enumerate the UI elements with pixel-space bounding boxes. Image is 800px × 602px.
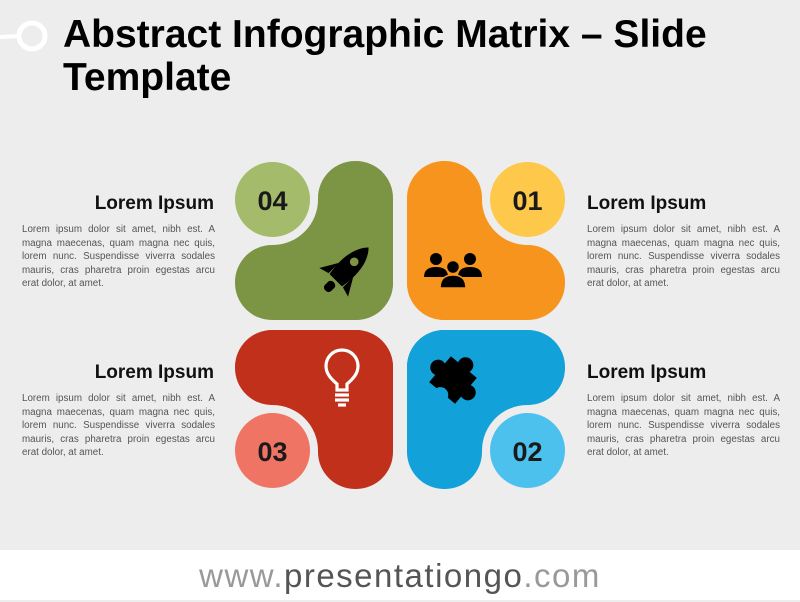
tile 04 green [227,154,393,320]
tile 03 red [227,330,393,496]
text block 01 [587,193,780,289]
title: Abstract Infographic Matrix – Slide [63,13,707,56]
text block 03 [22,362,215,458]
tile 04 green: 04 [257,186,288,216]
text: Lorem Ipsum [587,193,706,214]
icon: team [424,253,482,288]
icon: rocket [311,233,383,305]
text: Lorem Ipsum [95,362,214,383]
tile 02 blue [407,330,573,496]
text: Lorem Ipsum [95,193,214,214]
footer: www.presentationgo.com [199,557,601,594]
title [63,13,707,99]
tile 01 orange [407,154,573,320]
icon: bulb [326,350,358,405]
footer [0,550,800,600]
tile 01 orange: 01 [512,186,543,216]
text: Lorem ipsum dolor sit amet, nibh est. A magna maecenas, quam magna nec quis, lorem nunc. Suspendisse viverra sodales mauris, cras pharetra proin egestas arcu erat dolor, at amet. [587,393,780,458]
text block 04 [22,193,215,289]
text: Lorem Ipsum [587,362,706,383]
tile 02 blue: 02 [512,437,543,467]
text block 02 [587,362,780,458]
text: Lorem ipsum dolor sit amet, nibh est. A magna maecenas, quam magna nec quis, lorem nunc. Suspendisse viverra sodales mauris, cras pharetra proin egestas arcu erat dolor, at amet. [587,224,780,289]
title: Template [63,56,231,99]
text: Lorem ipsum dolor sit amet, nibh est. A magna maecenas, quam magna nec quis, lorem nunc. Suspendisse viverra sodales mauris, cras pharetra proin egestas arcu erat dolor, at amet. [22,393,215,458]
title icon [0,20,48,52]
tile 03 red: 03 [257,437,288,467]
text: Lorem ipsum dolor sit amet, nibh est. A magna maecenas, quam magna nec quis, lorem nunc. Suspendisse viverra sodales mauris, cras pharetra proin egestas arcu erat dolor, at amet. [22,224,215,289]
icon: puzzle [415,342,491,418]
